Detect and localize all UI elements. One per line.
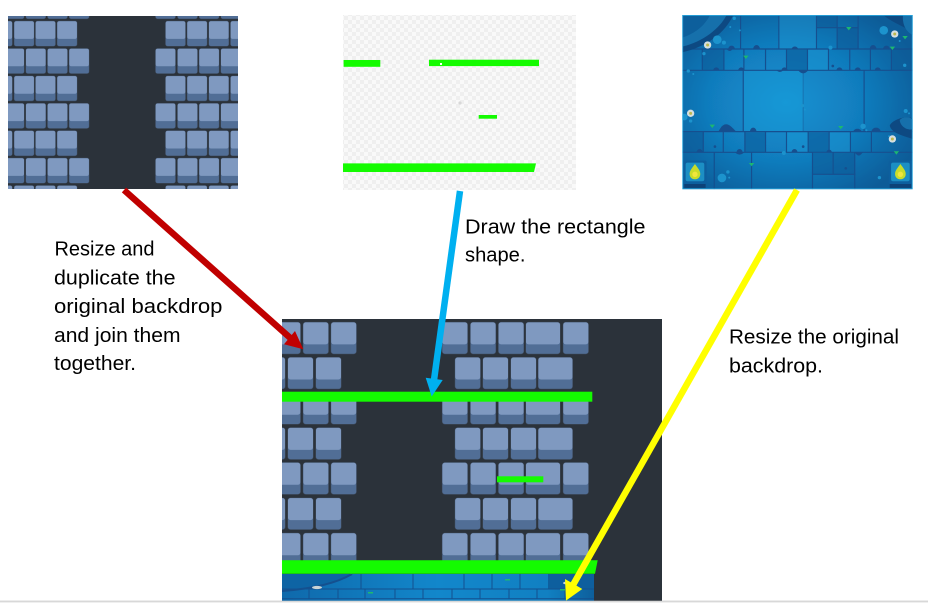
green platform small xyxy=(497,476,543,482)
text: step one caption: together. xyxy=(54,353,136,375)
text: step one caption: original backdrop xyxy=(54,296,222,318)
text: step one caption: and join them xyxy=(54,325,180,347)
text: step three caption xyxy=(729,326,899,377)
panel: green rectangles on transparent canvas xyxy=(343,15,576,190)
panel: combined backdrop result xyxy=(260,319,662,601)
text: step two caption: shape. xyxy=(465,245,526,267)
page bottom edge xyxy=(0,601,928,603)
text: step two caption: Draw the rectangle xyxy=(465,216,646,238)
text: step one caption: Resize and xyxy=(54,238,154,260)
arrow: red xyxy=(124,190,303,349)
text: step one caption: duplicate the xyxy=(54,268,176,290)
arrow: yellow xyxy=(565,190,797,601)
panel: brick backdrop original xyxy=(8,16,238,189)
green platform bottom xyxy=(282,560,598,574)
panel: blue stone backdrop original xyxy=(682,15,913,190)
text: step three caption: Resize the original xyxy=(729,326,899,348)
arrow: blue xyxy=(426,191,460,396)
text: step two caption xyxy=(465,216,646,267)
blue backdrop strip xyxy=(282,574,594,601)
text: step three caption: backdrop. xyxy=(729,355,823,377)
green platform top xyxy=(282,392,592,402)
text: step one caption xyxy=(54,238,222,375)
